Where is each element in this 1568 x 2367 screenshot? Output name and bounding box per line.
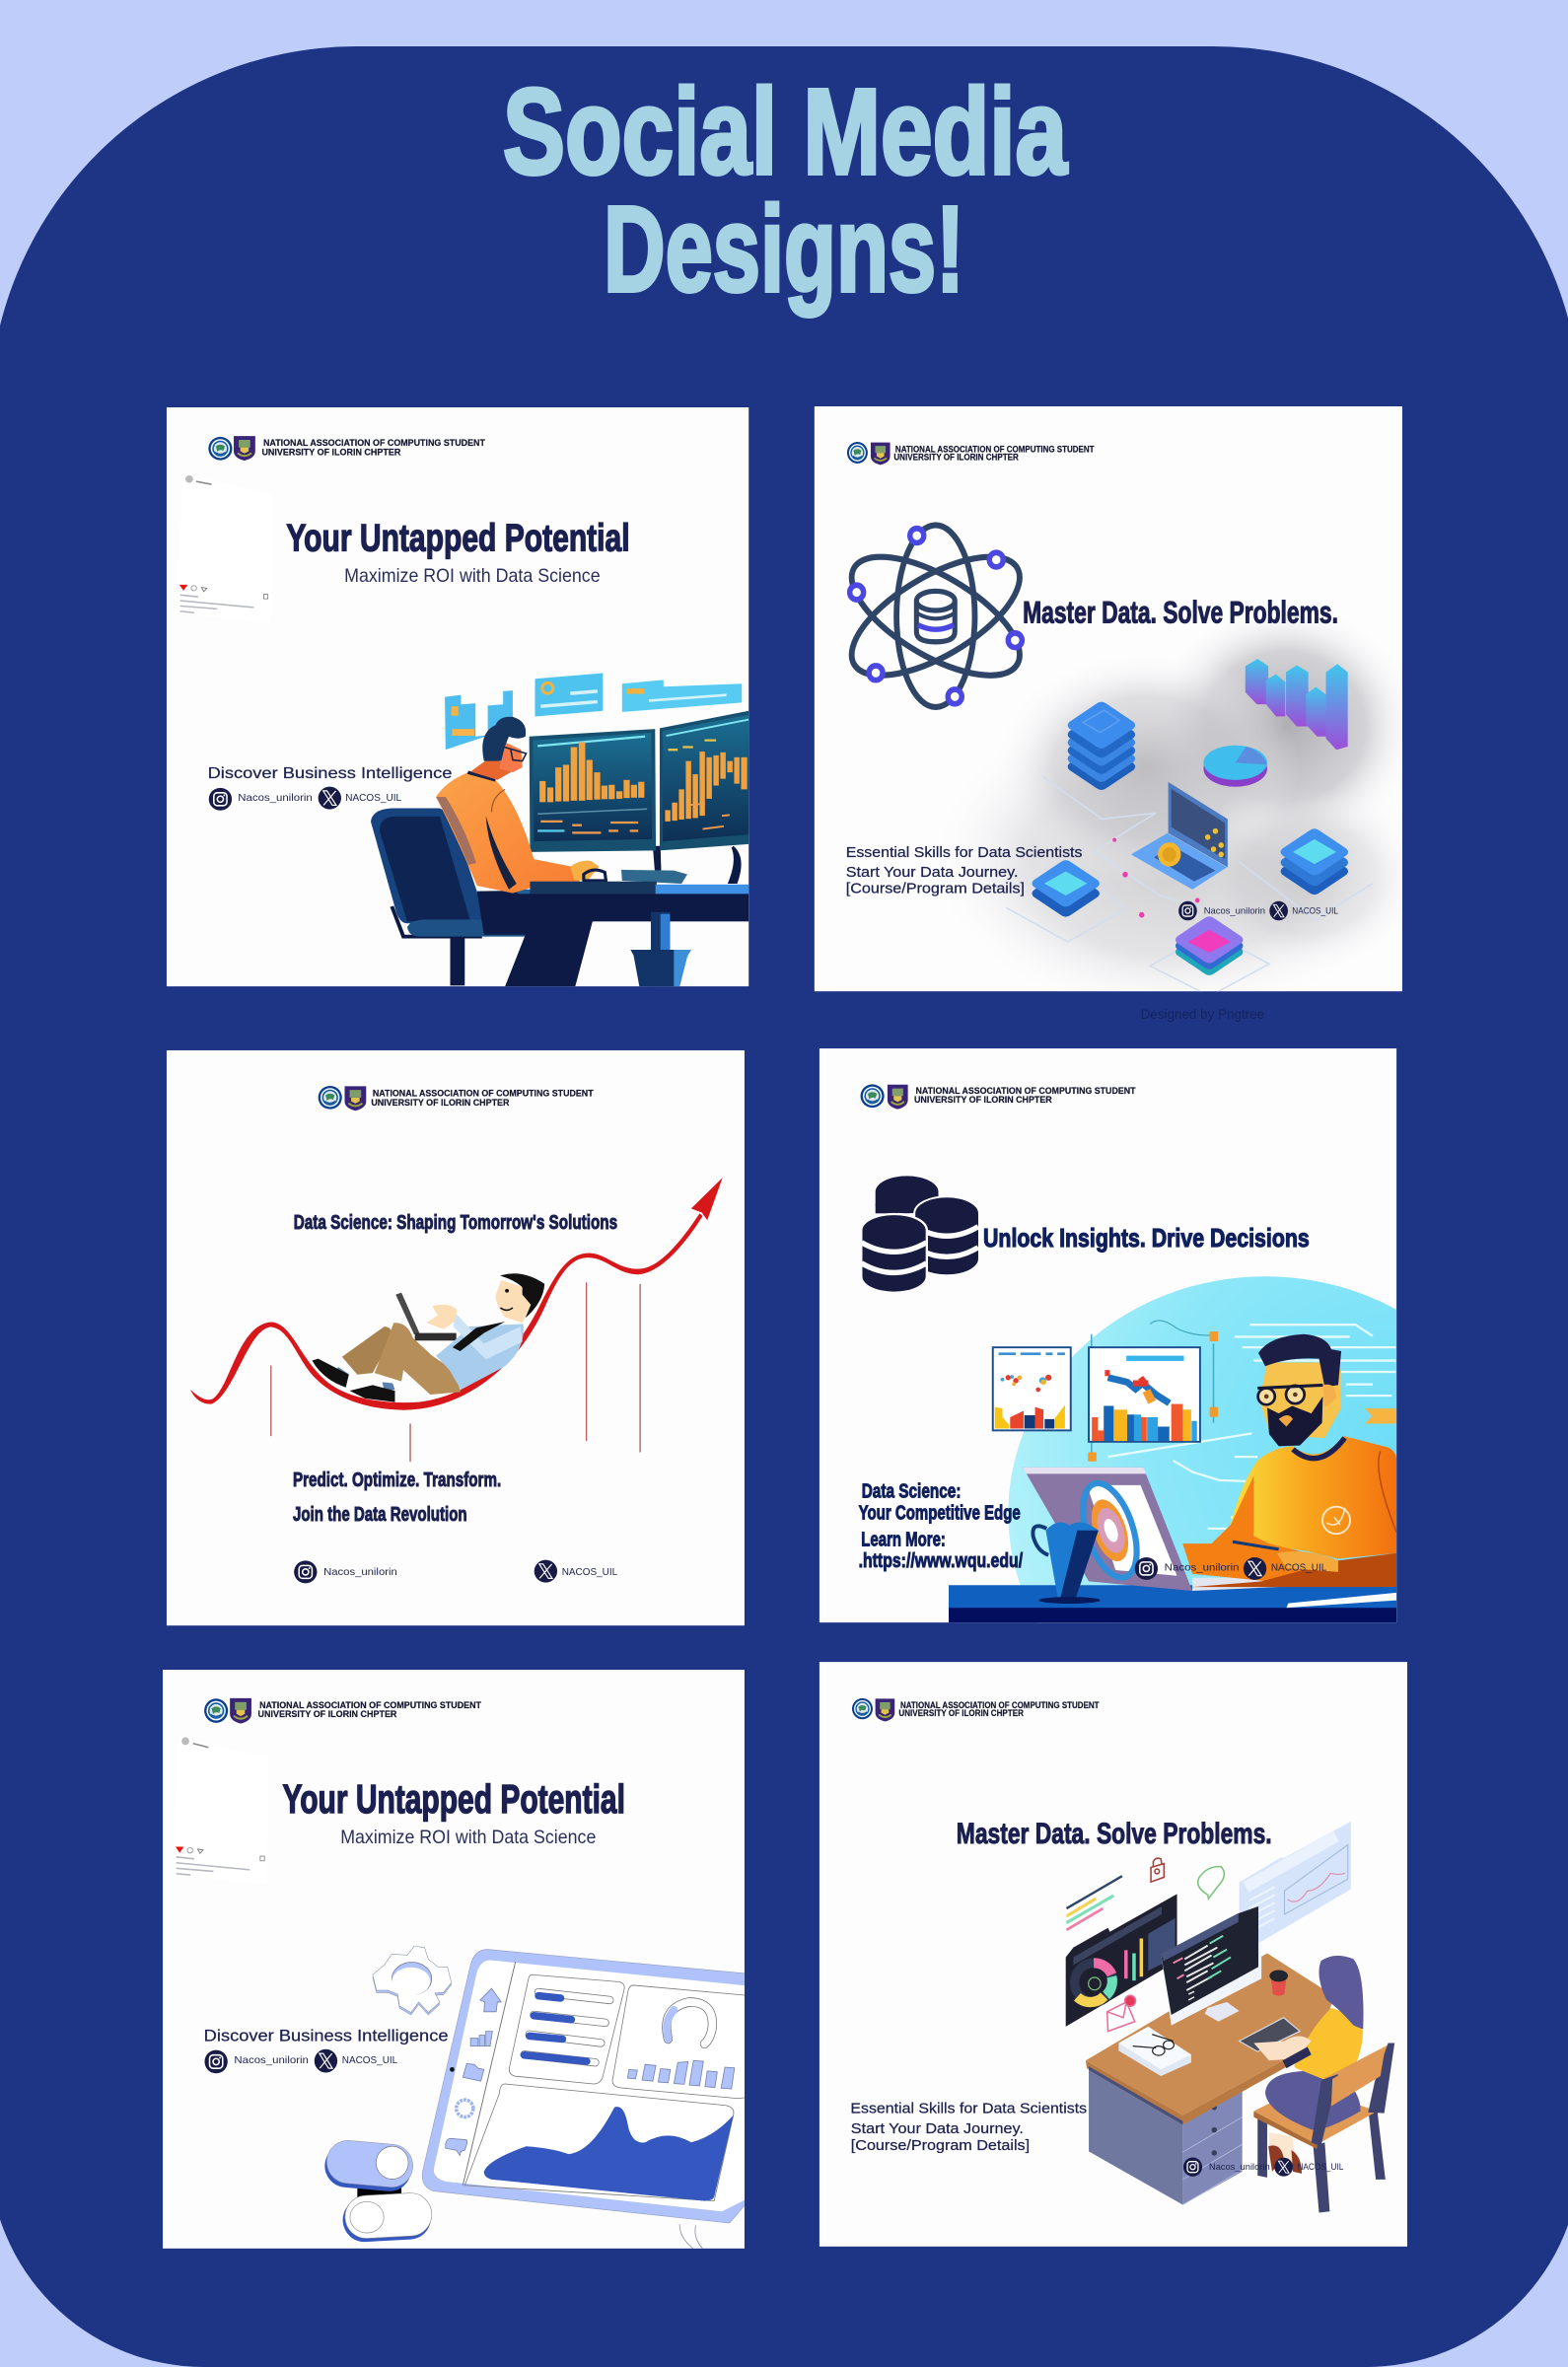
toggle switches	[323, 2138, 433, 2243]
analyst	[436, 717, 606, 986]
competitive edge copy: Your Competitive Edge	[859, 1502, 1021, 1525]
heading: Master Data. Solve Problems.	[957, 1818, 1272, 1850]
icon: isometric laptop with coin	[1131, 782, 1228, 890]
tagline: Discover Business Intelligence	[208, 765, 453, 782]
social handles	[294, 1560, 618, 1583]
social handles: NACOS_UIL	[1292, 905, 1338, 915]
monitors with bar charts	[530, 711, 748, 884]
arrow: red growth curve	[190, 1178, 723, 1410]
tagline: Discover Business Intelligence	[204, 2027, 449, 2045]
competitive edge copy: Learn More:	[861, 1529, 946, 1550]
body copy: Essential Skills for Data Scientists	[846, 845, 1082, 861]
header: association logos and name	[861, 1084, 1136, 1110]
social handles: NACOS_UIL	[562, 1567, 618, 1578]
header: association logos and name	[319, 1086, 594, 1111]
slider card	[509, 1974, 624, 2084]
seated woman on chair	[1253, 1956, 1394, 2212]
panel: master data, isometric data flow	[815, 406, 1423, 1022]
floating data cards	[445, 673, 742, 750]
heading: Data Science: Shaping Tomorrow's Solutions	[294, 1211, 617, 1234]
header: association logos and name: UNIVERSITY OF ILORIN CHPTER	[914, 1095, 1052, 1105]
header: association logos and name: UNIVERSITY OF ILORIN CHPTER	[261, 447, 401, 457]
server stack	[1068, 702, 1135, 790]
heading: Unlock Insights. Drive Decisions	[983, 1223, 1310, 1253]
drop lines	[271, 1282, 640, 1462]
stand cable	[679, 2224, 703, 2249]
circular sky backdrop	[1008, 1276, 1396, 1623]
body copy: [Course/Program Details]	[851, 2138, 1030, 2154]
body copy	[846, 845, 1082, 897]
body copy: Start Your Data Journey.	[851, 2121, 1024, 2137]
icon: isometric pie chart	[1203, 746, 1267, 787]
node stacks	[1032, 828, 1348, 975]
body copy: Essential Skills for Data Scientists	[850, 2102, 1087, 2117]
holographic browser window	[1240, 1822, 1351, 1955]
panel: shaping tomorrow's solutions, growth curve	[167, 1050, 745, 1625]
social handles: Nacos_unilorin	[238, 793, 313, 804]
stock watermark on backdrop: Designed by Pngtree	[1141, 1007, 1264, 1022]
header: association logos and name	[204, 1698, 481, 1724]
icon: outlined gear	[373, 1946, 452, 2015]
gauge card	[612, 1985, 747, 2099]
social handles: Nacos_unilorin	[1204, 905, 1265, 915]
social handles	[1183, 2157, 1343, 2177]
sidebar icons	[446, 1988, 501, 2155]
chart panel: scatter and bars	[993, 1347, 1071, 1430]
area chart card	[464, 2084, 734, 2201]
social handles	[209, 787, 402, 811]
header: association logos and name: NATIONAL ASSOCIATION OF COMPUTING STUDENT	[373, 1088, 594, 1098]
tagline lines: Join the Data Revolution	[293, 1503, 467, 1526]
header: association logos and name	[208, 436, 485, 461]
header: association logos and name: NATIONAL ASSOCIATION OF COMPUTING STUDENT	[263, 438, 485, 448]
body copy: Start Your Data Journey.	[846, 865, 1018, 881]
icon: mail with alert	[1107, 1995, 1136, 2032]
panel: master data, isometric desk	[820, 1662, 1407, 2247]
subheading: Maximize ROI with Data Science	[340, 1827, 596, 1848]
bearded man	[1182, 1334, 1396, 1587]
pink connector dots	[1112, 838, 1199, 917]
tagline lines: Predict. Optimize. Transform.	[293, 1469, 501, 1491]
icon: database cylinders	[862, 1176, 978, 1292]
social handles: NACOS_UIL	[342, 2055, 398, 2066]
table	[949, 1585, 1396, 1609]
title: Designs!	[604, 182, 964, 318]
keyboard	[1240, 2018, 1300, 2051]
header: association logos and name: UNIVERSITY OF ILORIN CHPTER	[898, 1708, 1024, 1718]
social handles	[204, 2049, 398, 2073]
title: Social Media	[503, 65, 1068, 200]
panel: your untapped potential, analyst at monitors	[167, 407, 748, 986]
reclining man with laptop	[312, 1273, 544, 1402]
social handles: Nacos_unilorin	[323, 1567, 397, 1578]
soft grey backdrop shadow	[983, 623, 1394, 984]
coloured strokes	[1066, 1876, 1122, 1930]
body copy: [Course/Program Details]	[846, 881, 1025, 897]
social handles: NACOS_UIL	[1271, 1563, 1327, 1574]
subheading: Maximize ROI with Data Science	[344, 566, 601, 587]
social handles: NACOS_UIL	[1297, 2162, 1343, 2172]
tablet dashboard	[422, 1950, 747, 2223]
header: association logos and name: NATIONAL ASSOCIATION OF COMPUTING STUDENT	[916, 1086, 1136, 1096]
social handles: Nacos_unilorin	[1165, 1563, 1240, 1574]
social handles: Nacos_unilorin	[1209, 2162, 1270, 2172]
social handles	[1135, 1557, 1327, 1580]
laptop	[1023, 1468, 1334, 1591]
chart panel: heatmap and bars	[1089, 1347, 1200, 1442]
desk	[1086, 1954, 1334, 2205]
panel: your untapped potential, tablet dashboard	[163, 1670, 747, 2249]
competitive edge copy	[859, 1480, 1023, 1572]
panel: unlock insights, bearded analyst	[819, 1048, 1396, 1623]
social handles: NACOS_UIL	[345, 793, 402, 804]
competitive edge copy: .https://www.wqu.edu/	[859, 1549, 1023, 1572]
title	[503, 65, 1068, 318]
backdrop circuit lines	[1107, 1325, 1395, 1529]
instagram post mockup	[179, 475, 268, 613]
icon: padlock	[1151, 1858, 1164, 1882]
coffee cup	[1269, 1971, 1288, 1996]
header: association logos and name: UNIVERSITY OF ILORIN CHPTER	[893, 452, 1019, 462]
circuit floor lines	[1006, 777, 1373, 996]
heading: Your Untapped Potential	[282, 1778, 625, 1822]
icon: isometric bar chart	[1246, 659, 1348, 750]
desk and keyboard	[513, 870, 748, 986]
body copy	[850, 2102, 1087, 2154]
header: association logos and name: NATIONAL ASSOCIATION OF COMPUTING STUDENT	[900, 1700, 1100, 1710]
header: association logos and name	[852, 1698, 1100, 1722]
header: association logos and name	[847, 442, 1095, 465]
analyst's chair	[371, 808, 529, 985]
icon: atom with database core	[835, 525, 1036, 707]
tagline lines	[293, 1469, 501, 1526]
competitive edge copy: Data Science:	[862, 1480, 961, 1502]
heading: Your Untapped Potential	[286, 517, 630, 559]
header: association logos and name: UNIVERSITY OF ILORIN CHPTER	[371, 1098, 510, 1108]
heading: Master Data. Solve Problems.	[1023, 597, 1338, 630]
coffee mug	[1033, 1523, 1101, 1604]
notebook with glasses	[1118, 2027, 1191, 2076]
icon: speech bubble	[1198, 1867, 1224, 1899]
monitor with code	[1161, 1906, 1261, 2026]
header: association logos and name: UNIVERSITY OF ILORIN CHPTER	[258, 1709, 397, 1719]
header: association logos and name: NATIONAL ASSOCIATION OF COMPUTING STUDENT	[259, 1700, 481, 1710]
header: association logos and name: NATIONAL ASSOCIATION OF COMPUTING STUDENT	[895, 444, 1095, 455]
dashboard screen with donut chart	[1066, 1894, 1177, 2027]
instagram post mockup	[174, 1737, 268, 1884]
social handles	[1178, 901, 1338, 920]
social handles: Nacos_unilorin	[234, 2055, 309, 2066]
